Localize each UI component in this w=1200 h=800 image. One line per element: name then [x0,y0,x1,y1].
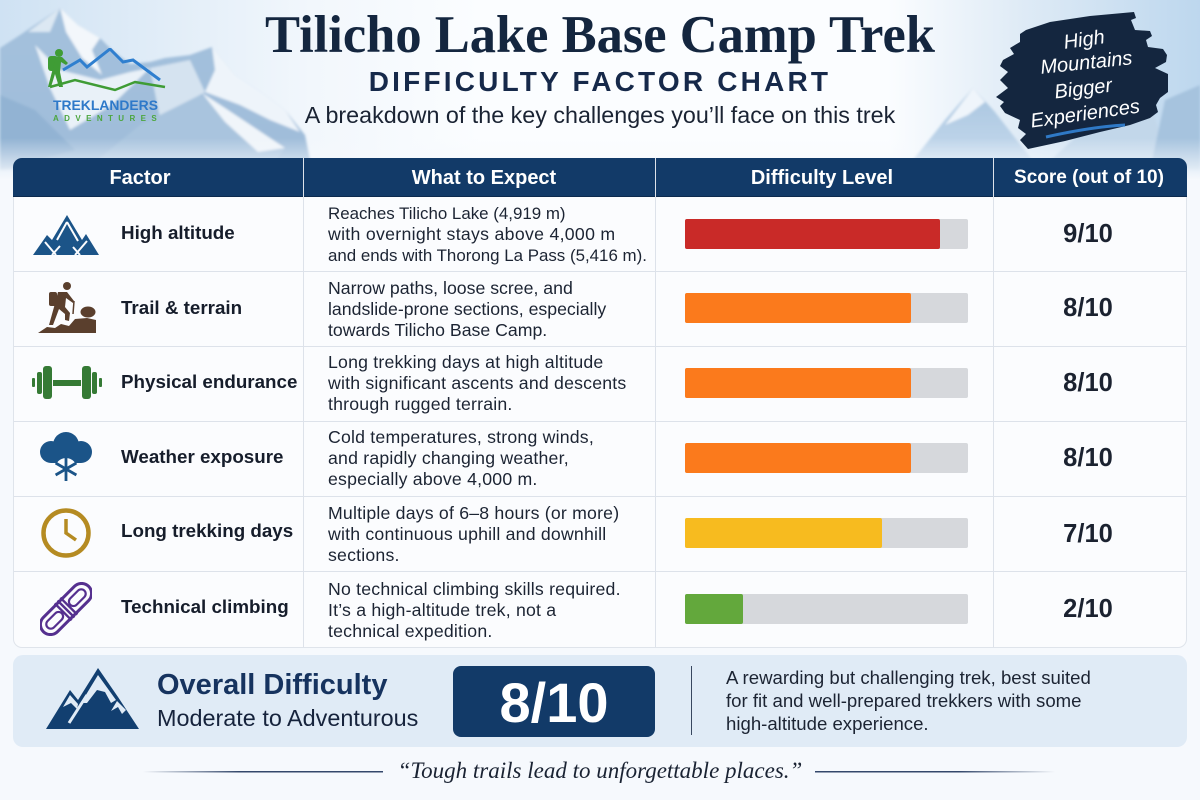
tagline: A breakdown of the key challenges you’ll face on this trek [305,102,895,128]
text: overall summary: A rewarding but challenging trek, best suited [726,667,1091,688]
badge text: Mountains [1039,47,1133,79]
badge: brush stroke slogan [996,12,1168,149]
description: Long trekking days: with continuous uphill and downhill [328,524,606,544]
logo: Treklanders Adventures [48,48,166,123]
badge underline [1046,125,1125,137]
description: Weather exposure: Cold temperatures, strong winds, [328,427,594,447]
label: Physical endurance: Physical endurance [121,371,297,392]
description: Physical endurance: Long trekking days at high altitude [328,352,603,372]
description: Physical endurance: with significant ascents and descents [328,373,626,393]
bar: Technical climbing 2/10 [685,594,968,624]
text: overall summary: high-altitude experience. [726,713,929,734]
quote text: “Tough trails lead to unforgettable places.” [398,758,802,783]
text: overall summary [726,667,1091,734]
bar: High altitude 9/10 [685,219,968,249]
score: Weather exposure: 8/10 [1063,444,1113,472]
label: Technical climbing: Technical climbing [121,596,289,617]
description: Trail & terrain: Narrow paths, loose scree, and [328,278,573,298]
score: High altitude: 9/10 [1063,220,1113,248]
label: Trail & terrain: Trail & terrain [121,297,242,318]
score: Long trekking days: 7/10 [1063,520,1113,548]
bar: Long trekking days 7/10 [685,518,968,548]
description: High altitude: and ends with Thorong La Pass (5,416 m). [328,246,647,265]
icon: hiker [38,282,96,333]
description: Long trekking days: sections. [328,545,400,565]
text: Moderate to Adventurous: Moderate to Adventurous [157,705,418,731]
icon: logo mountains [63,49,160,80]
badge text: Experiences [1029,96,1141,133]
bar: Trail & terrain 8/10 [685,293,968,323]
icon: rope [40,582,92,636]
text: overall summary: for fit and well-prepared trekkers with some [726,690,1082,711]
description: Weather exposure: and rapidly changing weather, [328,448,569,468]
description: Weather exposure: especially above 4,000 m. [328,469,538,489]
badge text: High [1062,26,1106,54]
subtitle: DIFFICULTY FACTOR CHART [369,66,831,97]
icon: dumbbell [32,366,102,399]
description: Trail & terrain: towards Tilicho Base Camp. [328,320,547,340]
description: High altitude [328,204,647,265]
description: High altitude: with overnight stays above 4,000 m [328,224,615,244]
logo wordmark: TREKLANDERS [53,97,158,113]
label: Long trekking days: Long trekking days [121,520,293,541]
badge text [1029,26,1141,133]
description: Long trekking days: Multiple days of 6–8 hours (or more) [328,503,619,523]
table header bar [13,158,1187,197]
heading: Overall Difficulty: Overall Difficulty [157,669,387,701]
description: Trail & terrain [328,278,606,340]
header: Difficulty Level: Difficulty Level [751,167,893,189]
table body [13,190,1187,648]
description: Weather exposure [328,427,594,489]
icon: mountain [33,215,99,255]
icon: overall mountain [46,668,139,729]
header: What to Expect: What to Expect [412,167,556,189]
score: Technical climbing: 2/10 [1063,595,1113,623]
header: Score: Score (out of 10) [1014,167,1164,188]
label: High altitude: High altitude [121,222,235,243]
description: Physical endurance [328,352,626,414]
label: Weather exposure: Weather exposure [121,446,283,467]
description: Technical climbing: No technical climbing skills required. [328,578,621,598]
overall score box [453,666,655,737]
logo tagline: ADVENTURES [53,114,162,123]
description: Physical endurance: through rugged terrain. [328,394,513,414]
icon: brush stroke [996,12,1168,149]
description: Technical climbing: It’s a high-altitude trek, not a [328,600,556,620]
bar: Weather exposure 8/10 [685,443,968,473]
bar: Physical endurance 8/10 [685,368,968,398]
description: Long trekking days [328,503,619,565]
overall score box: 8/10 [500,671,608,734]
icon: logo hiker [48,49,68,87]
header: Factor: Factor [109,167,171,189]
score: Physical endurance: 8/10 [1063,369,1113,397]
description: Technical climbing [328,578,621,640]
description: Technical climbing: technical expedition. [328,620,492,640]
background mountains [0,0,1200,174]
badge text: Bigger [1053,74,1115,103]
description: Trail & terrain: landslide-prone sections, especially [328,298,606,318]
icon: logo trail [50,80,165,90]
score: Trail & terrain: 8/10 [1063,294,1113,322]
title: Tilicho Lake Base Camp Trek [265,6,935,64]
icon: snow cloud [40,432,92,481]
description: High altitude: Reaches Tilicho Lake (4,919 m) [328,204,566,223]
icon: clock [41,508,91,558]
panel: overall difficulty [13,655,1187,747]
